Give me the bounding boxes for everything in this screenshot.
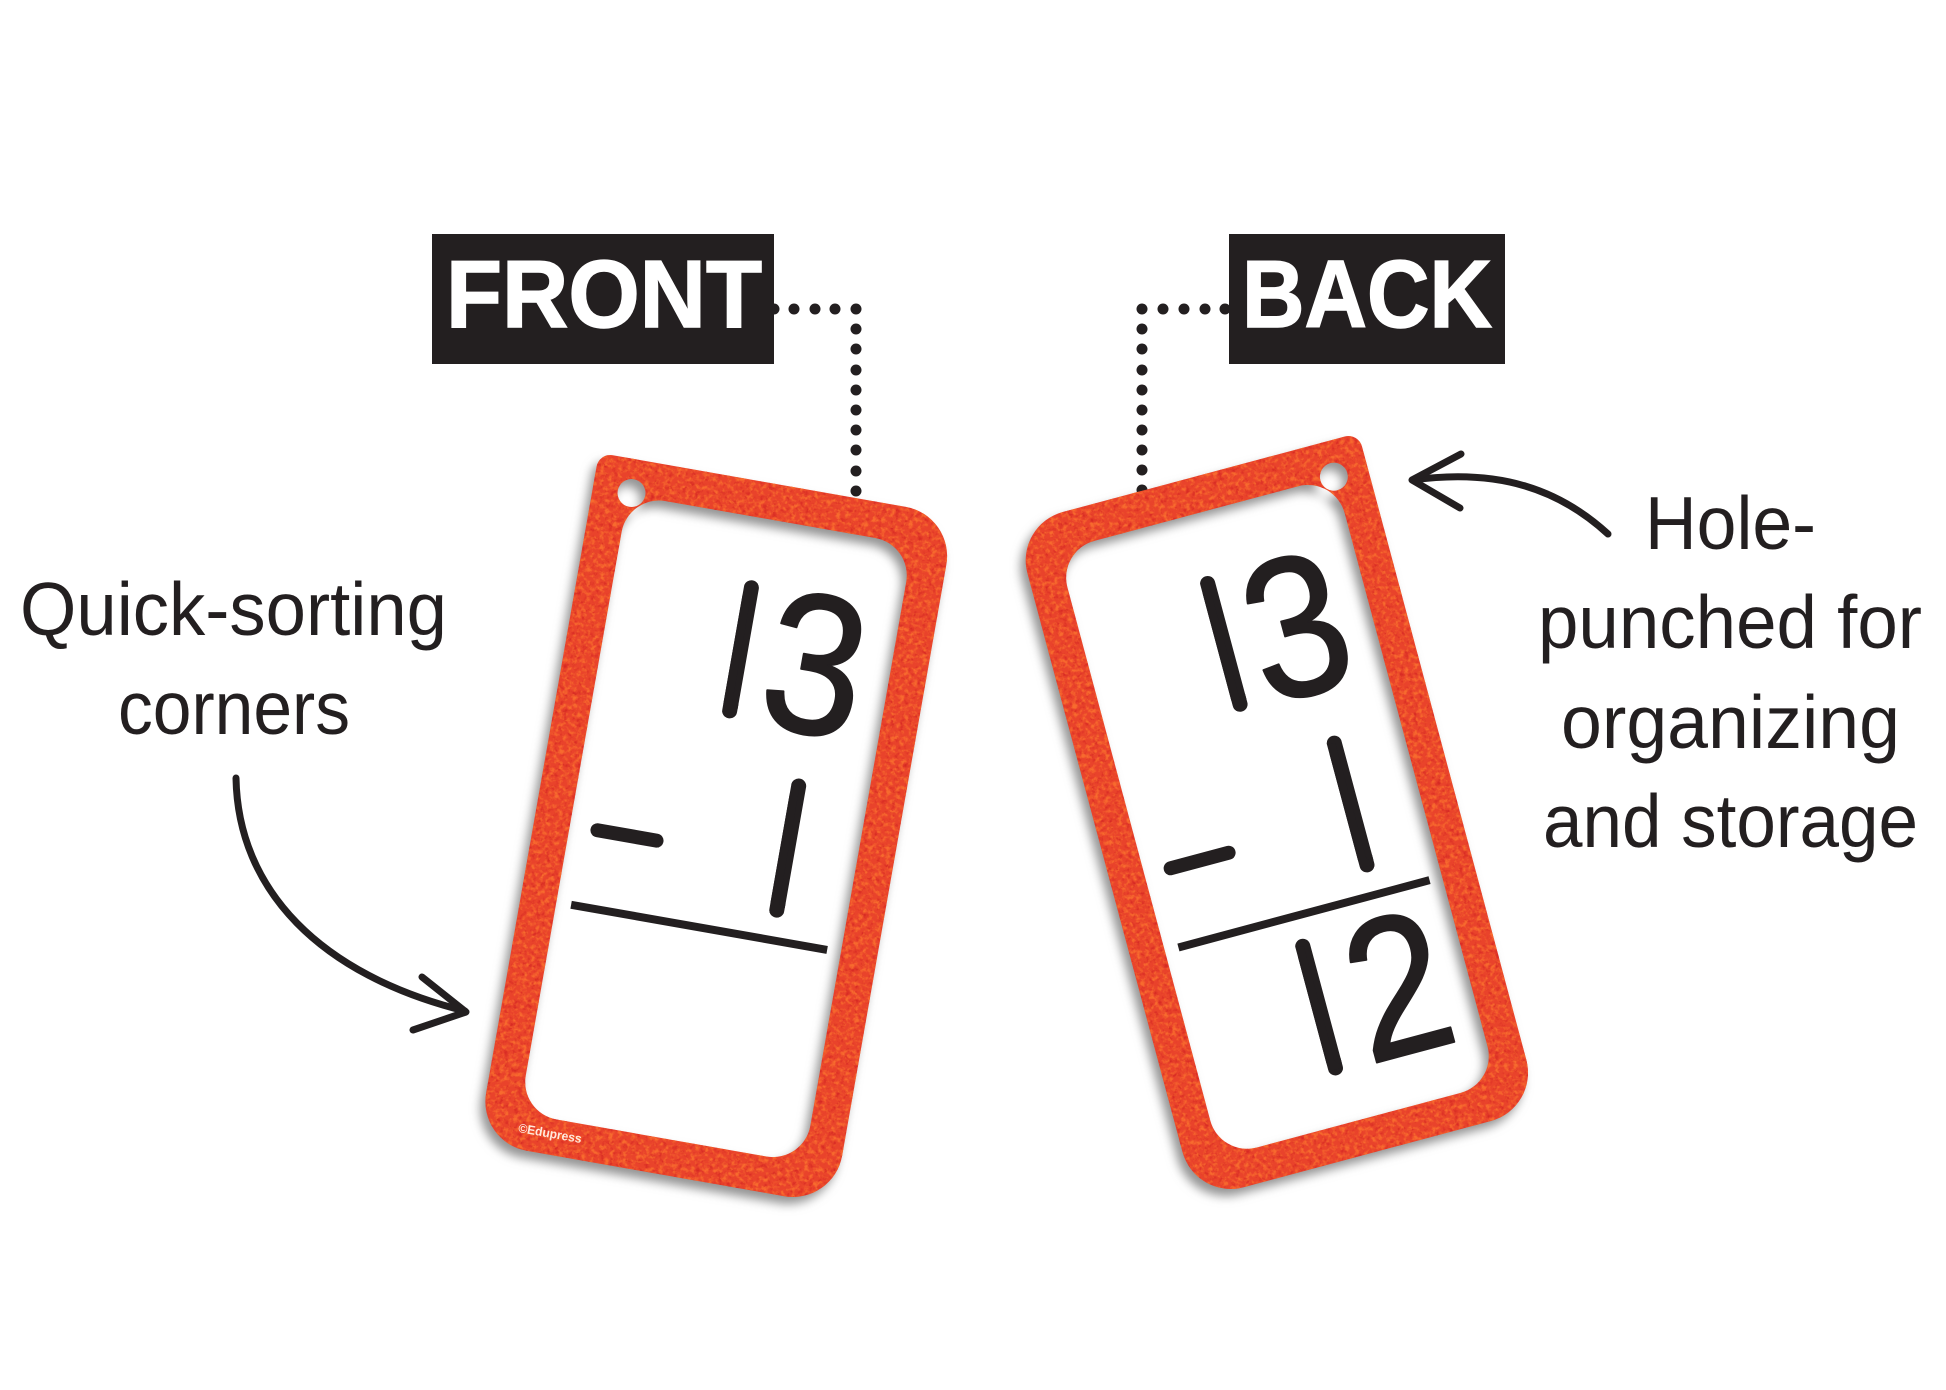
callout: hole-punched: Hole- — [1645, 481, 1816, 565]
back card problem and answer: 1 — [1262, 685, 1427, 929]
arrow: to corner — [236, 778, 466, 1030]
front card problem: − — [573, 751, 681, 919]
dotted connector: front — [768, 304, 862, 496]
callout: quick-sorting corners: Quick-sorting — [20, 567, 447, 651]
arrow: to hole — [1412, 454, 1608, 534]
back card problem and answer: 1 — [1231, 888, 1396, 1132]
red felt frame with hole — [477, 453, 955, 1205]
back card problem and answer: 2 — [1322, 866, 1474, 1106]
callout: hole-punched: punched for — [1538, 580, 1922, 664]
card: back — [1014, 433, 1539, 1200]
front card problem — [518, 580, 862, 1143]
card: front — [477, 453, 955, 1205]
front card problem: 1 — [707, 728, 855, 967]
FRONT label: FRONT — [446, 241, 762, 348]
back card problem and answer — [1164, 555, 1456, 1076]
front card problem: ©Edupress — [517, 1121, 583, 1146]
callout: quick-sorting corners — [20, 567, 447, 750]
red felt frame with hole — [1014, 433, 1539, 1200]
BACK label: BACK — [1242, 241, 1492, 348]
dotted connector: back — [1136, 304, 1230, 496]
callout: hole-punched: and storage — [1543, 779, 1918, 863]
front card problem: 3 — [747, 547, 884, 784]
callout: quick-sorting corners: corners — [118, 666, 350, 750]
callout: hole-punched — [1538, 481, 1922, 863]
back card problem and answer: 1 — [1135, 524, 1300, 768]
back card problem and answer: 3 — [1219, 506, 1374, 748]
front card problem: 1 — [660, 529, 808, 768]
back card problem and answer: − — [1140, 774, 1259, 946]
infographic canvas — [23, 234, 1921, 1210]
callout: hole-punched: organizing — [1561, 680, 1900, 764]
